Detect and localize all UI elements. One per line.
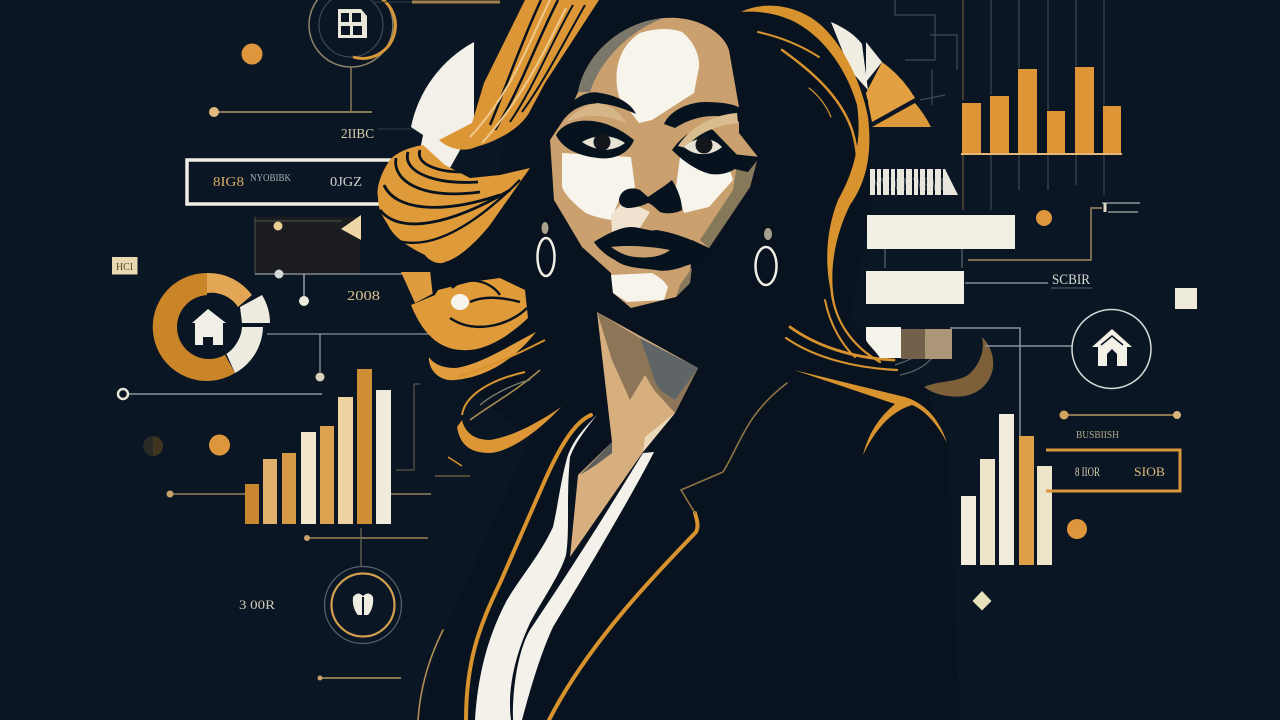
icon: house in circle right: [1072, 310, 1151, 388]
hair: top left strands: [439, 0, 599, 150]
diamond: [972, 591, 992, 610]
face base: [550, 18, 758, 308]
hair and body silhouette: [418, 0, 960, 720]
right background pie segments: [831, 22, 931, 127]
orange outlined data box: [1046, 450, 1180, 491]
dark panel with triangle marker: [255, 215, 440, 306]
label: 2008: 2008: [347, 289, 380, 304]
hair: left curl: [377, 145, 530, 263]
label: SCBIR: SCBIR: [1052, 272, 1090, 288]
lips: [594, 227, 712, 271]
bottom left connector: [318, 676, 401, 680]
left earring: [538, 222, 554, 276]
connector line with dot: [209, 67, 372, 117]
hair: right strands: [741, 6, 897, 370]
data box with labels: NYOBIBK: [250, 173, 292, 184]
lower left pie segment: [401, 272, 437, 303]
jacket lapel outline: [418, 383, 787, 720]
hair: right lower curl: [895, 337, 993, 397]
nose: [619, 180, 682, 213]
white bar 2: [866, 271, 964, 304]
left background pie segment: [411, 42, 474, 168]
blouse: [475, 415, 654, 720]
label: BUSBIISH: BUSBIISH: [1076, 429, 1119, 441]
data box with labels: 8IG8: [213, 175, 244, 190]
dots: left small: [143, 434, 230, 456]
tag: HCI: [116, 262, 133, 273]
striped label: [870, 169, 958, 195]
left eye: [556, 103, 634, 158]
label: 2IIBC: 2IIBC: [341, 127, 374, 142]
vertical grid lines of top chart: [963, 0, 1104, 210]
icon: bottom circular badge: [324, 566, 402, 644]
connector lines to donut: [267, 334, 430, 382]
right eye: [672, 113, 760, 174]
axis lines for left chart: [166, 384, 470, 566]
orange outlined data box: 8 IIOR: [1075, 464, 1100, 479]
shoulder accent: [794, 370, 947, 455]
dot: orange lower right: [1067, 519, 1087, 539]
bar chart: left: [245, 369, 391, 524]
line with two dots: [1060, 410, 1181, 420]
circuit lines near top: [895, 0, 957, 105]
tag: [112, 257, 138, 274]
hair: lower left curl: [411, 278, 561, 466]
eyebrows: [565, 92, 740, 128]
connector lines from squares: [950, 328, 1072, 445]
striped label: NYTOMWPAIIA: [872, 174, 952, 194]
icon: top circular badge with building: [309, 0, 395, 67]
dot: orange: [242, 44, 262, 64]
orange outlined data box: SIOB: [1134, 464, 1165, 479]
right earring: [756, 228, 776, 285]
donut chart with house icon: [153, 273, 270, 381]
data box with labels: [187, 160, 412, 204]
square: cream: [1175, 288, 1197, 309]
connector lines for white bars: [885, 203, 1140, 283]
bar chart: bottom right: [961, 414, 1052, 565]
data box with labels: 0JGZ: [330, 175, 362, 190]
white bar 1: [867, 215, 1015, 249]
dot: orange right: [1036, 210, 1052, 226]
neck and chest skin: [570, 312, 698, 557]
timeline line with ring marker: [118, 389, 322, 399]
label: 3008: 3 00R: [239, 597, 275, 612]
bar chart: top right: [961, 67, 1122, 154]
overlapping squares: [866, 327, 952, 359]
